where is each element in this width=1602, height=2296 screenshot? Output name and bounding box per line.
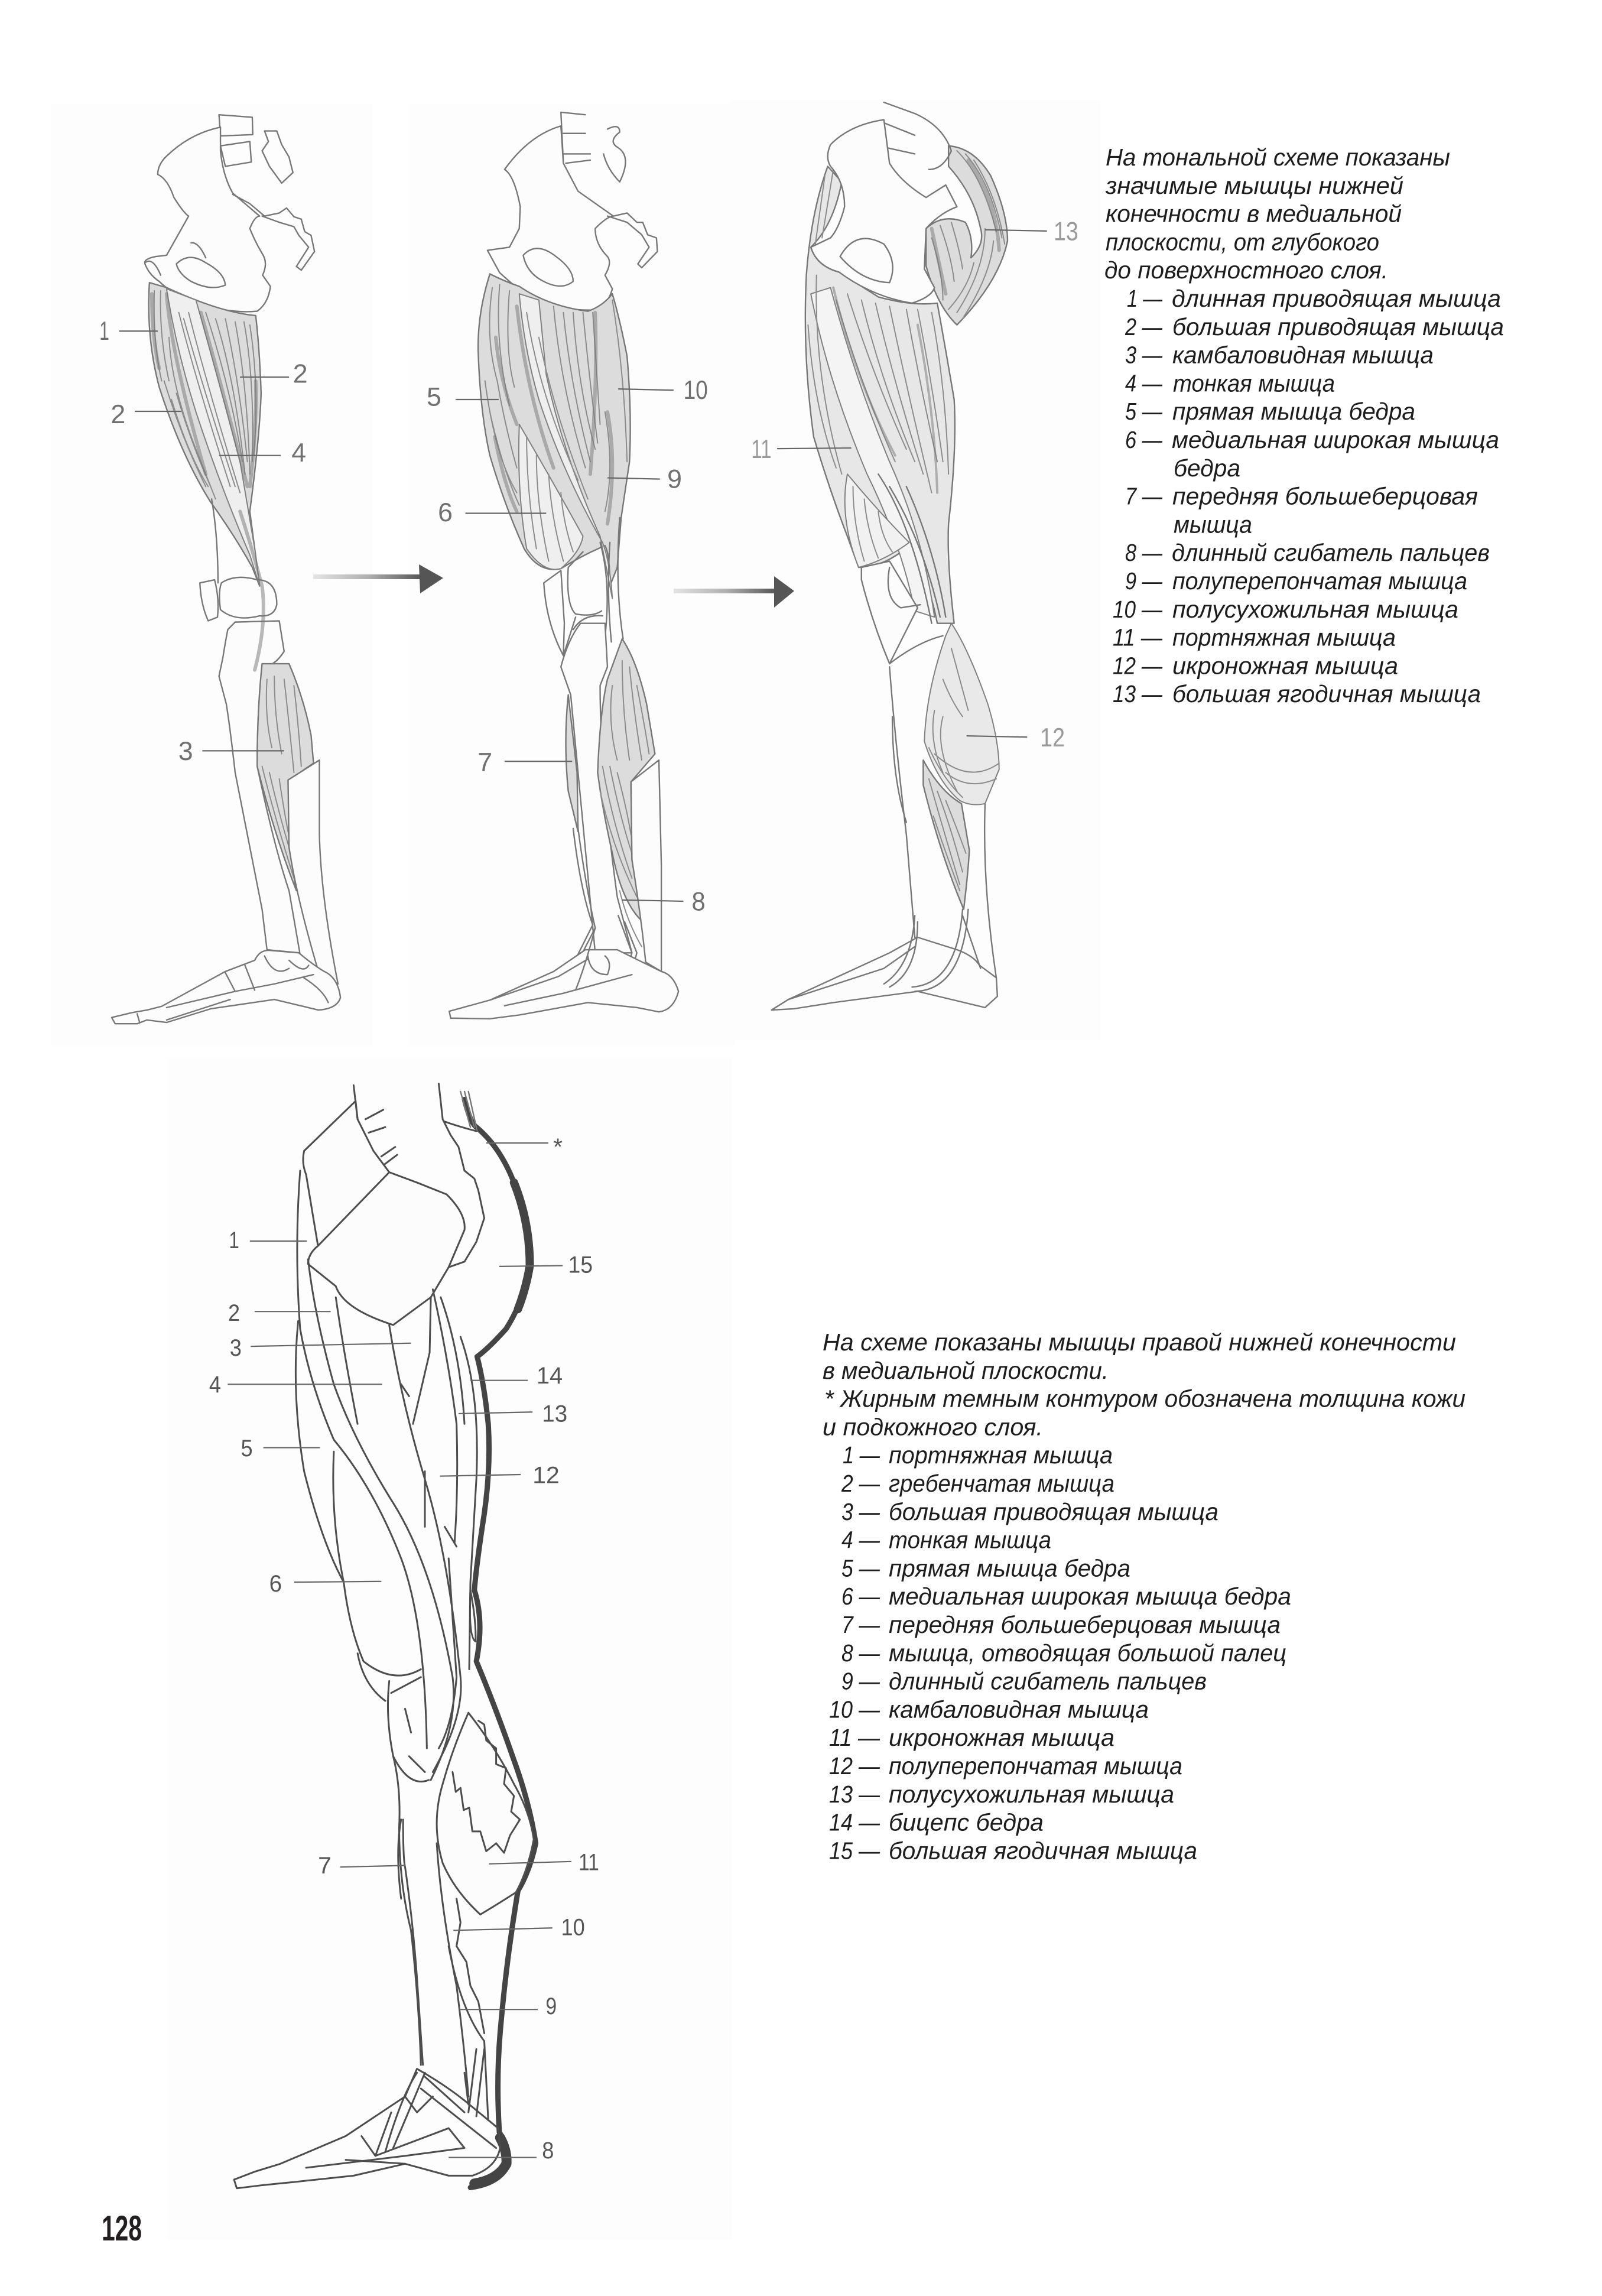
text block: tonal scheme description and legend: полуперепончатая мышца [1172,567,1467,595]
femur, patella and tibia [200,499,300,953]
labels figure 3: 13 [1054,217,1078,246]
text block: right limb diagram description and legend: в медиальной плоскости. [823,1357,1109,1384]
text block: tonal scheme description and legend: 1 — [1127,285,1163,312]
text block: tonal scheme description and legend: портняжная мышца [1172,624,1396,651]
text block: tonal scheme description and legend: большая ягодичная мышца [1172,680,1481,707]
labels figure 2: 7 [477,748,492,777]
text block: tonal scheme description and legend: мышца [1174,511,1252,538]
text block: tonal scheme description and legend: плоскости, от глубокого [1106,228,1379,255]
labels figure 4: * [553,1133,563,1160]
soleus [923,760,969,910]
text block: tonal scheme description and legend: длинный сгибатель пальцев [1172,539,1490,566]
text block: tonal scheme description and legend: икроножная мышца [1172,652,1398,679]
pelvis [488,112,658,310]
soleus muscle [257,664,338,984]
gluteus maximus [926,146,1008,325]
text block: tonal scheme description and legend: 8 — [1125,539,1163,566]
text block: tonal scheme description and legend: 13 — [1113,680,1163,707]
text block: right limb diagram description and legend: 7 — [841,1611,880,1638]
labels figure 4: 12 [532,1462,560,1489]
text block: right limb diagram description and legend: икроножная мышца [889,1724,1114,1751]
labels figure 4: 10 [561,1914,585,1940]
text block: tonal scheme description and legend: 7 — [1125,483,1163,510]
figure 1: deep muscle layer of the leg [99,115,340,1024]
labels figure 4: 2 [228,1300,240,1326]
text block: right limb diagram description and legend: 14 — [829,1809,880,1836]
text block: tonal scheme description and legend: 9 — [1125,567,1163,595]
text block: right limb diagram description and legend: большая ягодичная мышца [889,1837,1197,1864]
figure 3: superficial muscle layer of the leg [751,102,1078,1010]
thigh muscles [478,274,631,670]
text block: right limb diagram description and legend: 13 — [829,1781,880,1808]
text block: tonal scheme description and legend: большая приводящая мышца [1172,313,1504,340]
text block: tonal scheme description and legend: значимые мышцы нижней [1105,172,1403,199]
text block: tonal scheme description and legend: 3 — [1125,342,1163,369]
text block: right limb diagram description and legend: и подкожного слоя. [823,1413,1043,1440]
text block: right limb diagram description and legend [823,1329,1465,1864]
labels figure 4 [209,1133,599,2164]
text block: right limb diagram description and legend: длинный сгибатель пальцев [889,1668,1207,1695]
labels figure 3: 11 [751,434,772,463]
labels figure 1: 1 [99,317,109,346]
labels figure 1 [99,317,308,766]
gastrocnemius [437,1713,534,2033]
labels figure 2: 9 [667,465,682,493]
pelvis [811,102,957,303]
text block: right limb diagram description and legend: камбаловидная мышца [889,1696,1149,1723]
text block: right limb diagram description and legend: большая приводящая мышца [889,1498,1218,1525]
labels figure 2 [427,376,708,917]
text block: right limb diagram description and legend: 15 — [829,1837,880,1864]
text block: right limb diagram description and legend: гребенчатая мышца [889,1470,1114,1497]
labels figure 2: 8 [692,888,706,917]
labels figure 2: 6 [438,498,453,527]
sartorius and thigh outlines [295,1171,477,1782]
text block: right limb diagram description and legend: передняя большеберцовая мышца [889,1611,1281,1638]
text block: tonal scheme description and legend: 2 — [1125,313,1163,340]
text block: right limb diagram description and legend: 11 — [829,1724,880,1751]
labels figure 4: 9 [545,1993,557,2019]
gastrocnemius [924,623,999,805]
text block: right limb diagram description and legend: 1 — [843,1441,880,1469]
labels figure 1: 4 [291,439,306,467]
labels figure 4: 4 [209,1371,221,1398]
text block: tonal scheme description and legend: медиальная широкая мышца [1172,426,1499,453]
labels figure 3 [751,217,1078,752]
text block: tonal scheme description and legend: 4 — [1125,369,1163,397]
thick skin contour [460,1092,536,2187]
background panel: first drawing [51,104,372,1046]
labels figure 4: 14 [537,1362,563,1389]
text block: right limb diagram description and legend: 8 — [841,1639,880,1667]
labels figure 4: 7 [318,1852,332,1879]
labels figure 4: 13 [542,1400,567,1427]
figure 4: right lower limb outline diagram with skin contour [209,1084,599,2188]
labels figure 4: 6 [269,1570,282,1597]
arrow: first to second drawing [313,564,443,593]
labels figure 4: 3 [230,1334,242,1361]
labels figure 3: 12 [1040,723,1065,752]
text block: tonal scheme description and legend: конечности в медиальной [1106,200,1402,228]
text block: right limb diagram description and legend: 2 — [841,1470,880,1497]
labels figure 4: 15 [568,1251,593,1278]
labels figure 1: 2 [111,400,125,429]
text block: tonal scheme description and legend: тонкая мышца [1173,369,1335,397]
text block: tonal scheme description and legend: 12 — [1113,652,1163,679]
text block: tonal scheme description and legend: На тональной схеме показаны [1106,144,1450,171]
text block: right limb diagram description and legend: 3 — [841,1498,880,1525]
knee and lower leg bones [544,552,632,953]
pelvis [145,115,314,311]
figure 2: middle muscle layer of the leg [427,112,708,1019]
labels figure 4: 11 [579,1849,599,1875]
text block: right limb diagram description and legend: полуперепончатая мышца [889,1752,1182,1779]
labels figure 2: 10 [683,376,708,405]
text block: tonal scheme description and legend: длинная приводящая мышца [1172,285,1501,312]
text block: right limb diagram description and legend: полусухожильная мышца [889,1781,1174,1808]
background panel: second drawing [409,104,735,1046]
text block: tonal scheme description and legend: камбаловидная мышца [1172,342,1434,369]
text block: tonal scheme description and legend: 5 — [1125,398,1163,425]
text block: tonal scheme description and legend: прямая мышца бедра [1172,398,1415,425]
text block: tonal scheme description and legend [1104,144,1504,707]
foot [772,910,997,1010]
text block: tonal scheme description and legend: полусухожильная мышца [1172,596,1458,623]
text block: right limb diagram description and legend: * Жирным темным контуром обозначена толщина кожи [824,1385,1465,1412]
calf muscles [583,639,661,992]
text block: right limb diagram description and legend: мышца, отводящая большой палец [889,1639,1286,1667]
text block: right limb diagram description and legend: прямая мышца бедра [889,1554,1130,1581]
text block: right limb diagram description and legend: 10 — [829,1696,880,1723]
text block: right limb diagram description and legend: медиальная широкая мышца бедра [889,1583,1291,1610]
text block: right limb diagram description and legend: 4 — [841,1527,880,1554]
foot [449,928,678,1019]
knee and tibia [393,1756,488,2120]
text block: tonal scheme description and legend: 6 — [1125,426,1163,453]
text block: right limb diagram description and legend: 5 — [841,1554,880,1581]
thigh muscles [805,167,955,623]
text block: right limb diagram description and legend: 12 — [829,1752,880,1779]
page number: 128 [102,2209,142,2248]
tibialis anterior [560,695,595,992]
labels figure 1: 2 [293,360,308,389]
foot bones [112,950,340,1024]
text block: tonal scheme description and legend: 11 — [1113,624,1163,651]
text block: right limb diagram description and legend: тонкая мышца [889,1527,1051,1554]
arrow: second to third drawing [674,576,794,608]
text block: right limb diagram description and legend: 6 — [841,1583,880,1610]
text block: right limb diagram description and legend: На схеме показаны мышцы правой нижней конечности [823,1329,1456,1356]
text block: tonal scheme description and legend: 10 — [1113,596,1163,623]
text block: right limb diagram description and legend: бицепс бедра [889,1809,1044,1836]
knee and lower leg [862,561,996,977]
text block: tonal scheme description and legend: бедра [1174,454,1240,482]
background panel: third drawing [730,100,1100,1040]
labels figure 4: 5 [241,1435,253,1462]
text block: tonal scheme description and legend: передняя большеберцовая [1172,483,1478,510]
labels figure 4: 8 [542,2136,554,2164]
text block: tonal scheme description and legend: до поверхностного слоя. [1104,256,1388,284]
labels figure 4: 1 [229,1226,239,1253]
labels figure 1: 3 [178,737,193,766]
labels figure 2: 5 [427,383,441,412]
text block: right limb diagram description and legend: портняжная мышца [889,1441,1113,1469]
foot and ankle [234,2049,500,2188]
adductor and gracilis muscles [149,282,261,586]
background panel: large drawing [167,1058,732,2240]
pelvis outline [303,1084,485,1325]
text block: right limb diagram description and legend: 9 — [841,1668,880,1695]
